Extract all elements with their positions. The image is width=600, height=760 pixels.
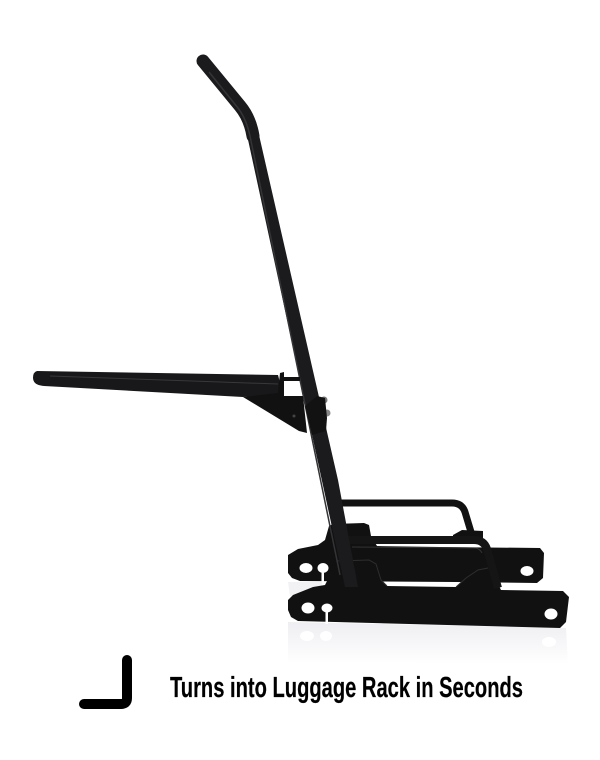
rear mounting plate	[288, 523, 544, 583]
hinge clamp and bolts	[305, 396, 330, 435]
luggage rack illustration	[33, 61, 569, 628]
plate reflection	[288, 582, 568, 664]
icon: angle bracket	[84, 660, 127, 704]
front mounting plate	[288, 560, 569, 628]
main upright tube	[203, 61, 358, 587]
rear tube loop	[340, 503, 471, 532]
front tube loop	[345, 540, 498, 588]
folding rack arm	[33, 371, 283, 397]
rear clamp block	[453, 530, 483, 540]
hinge bracket	[243, 372, 307, 433]
